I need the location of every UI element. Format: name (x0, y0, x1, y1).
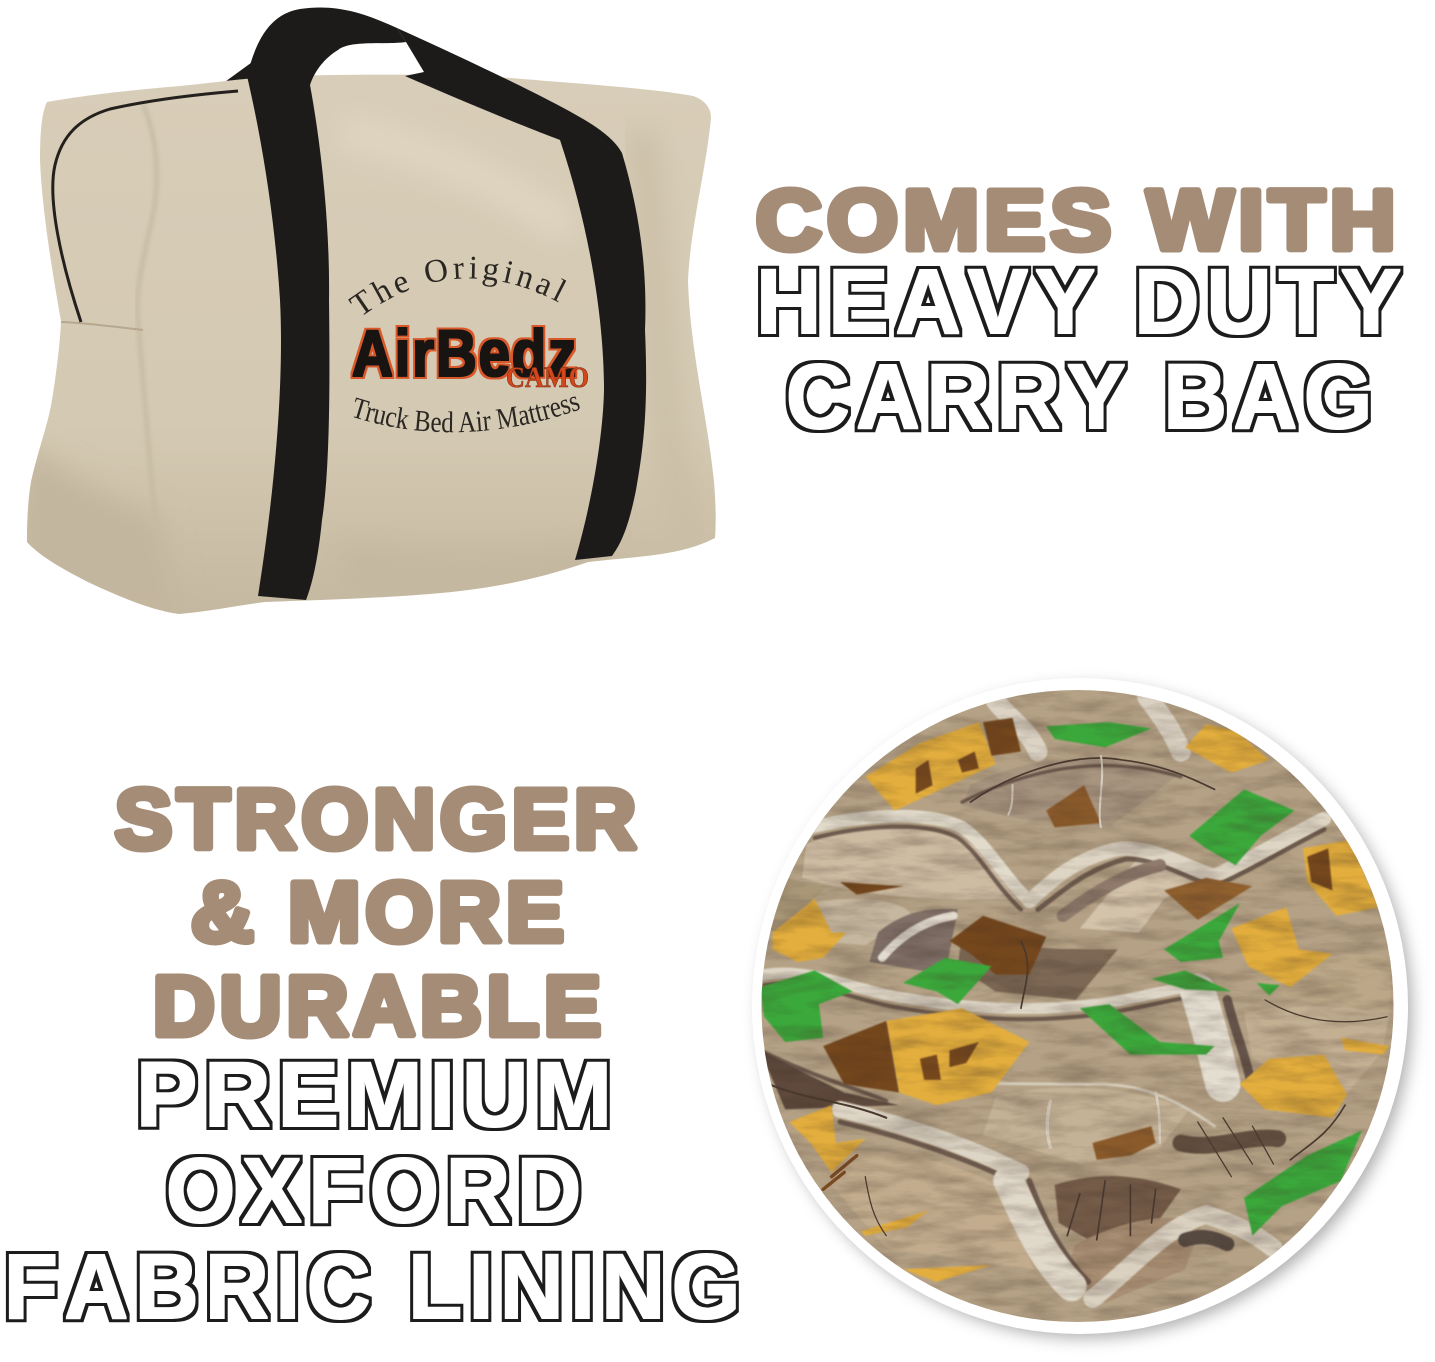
heading: stronger and more durable premium oxford fabric lining (4, 772, 747, 1338)
bag logo: AirBedz (352, 316, 578, 390)
camo bark bands (764, 697, 1324, 1299)
heading: comes with heavy duty carry bag: CARRY BAG (786, 346, 1379, 448)
camo grain texture (750, 680, 1410, 1340)
heading: stronger and more durable premium oxford fabric lining: PREMIUM (136, 1044, 619, 1146)
camo green foliage (760, 722, 1362, 1236)
heading: stronger and more durable premium oxford fabric lining: DURABLE (153, 959, 606, 1053)
heading: comes with heavy duty carry bag: COMES WITH (756, 173, 1401, 267)
bag rear strap (222, 52, 266, 84)
circle white ring (752, 678, 1408, 1334)
heading: stronger and more durable premium oxford fabric lining: STRONGER (115, 772, 641, 866)
bag logo: The Original (348, 256, 566, 315)
heading: comes with heavy duty carry bag: HEAVY DUTY (756, 251, 1408, 353)
heading: comes with heavy duty carry bag (756, 173, 1408, 448)
photo: camo fabric circle (750, 678, 1412, 1340)
camo dark twigs (768, 756, 1387, 1240)
bag logo: Truck Bed Air Mattress (354, 396, 580, 432)
bag shading and seams (20, 104, 690, 620)
bag right handle (397, 28, 646, 560)
camo brown leaves (823, 718, 1332, 1160)
bag zipper (53, 91, 238, 322)
bag body (27, 75, 716, 614)
camo fabric (750, 680, 1410, 1340)
circle shadow (760, 686, 1412, 1338)
camo plain patches (760, 758, 1391, 1303)
product photo: carry bag (27, 8, 716, 614)
heading: stronger and more durable premium oxford fabric lining: FABRIC LINING (4, 1236, 747, 1338)
heading: stronger and more durable premium oxford fabric lining: OXFORD (166, 1140, 588, 1242)
heading: stronger and more durable premium oxford fabric lining: & MORE (191, 865, 569, 959)
bag logo (348, 256, 589, 432)
camo fold shadows (760, 766, 1324, 1282)
bag logo: CAMO (506, 361, 589, 394)
camo yellow leaves (773, 722, 1389, 1282)
bag left handle (247, 7, 406, 600)
